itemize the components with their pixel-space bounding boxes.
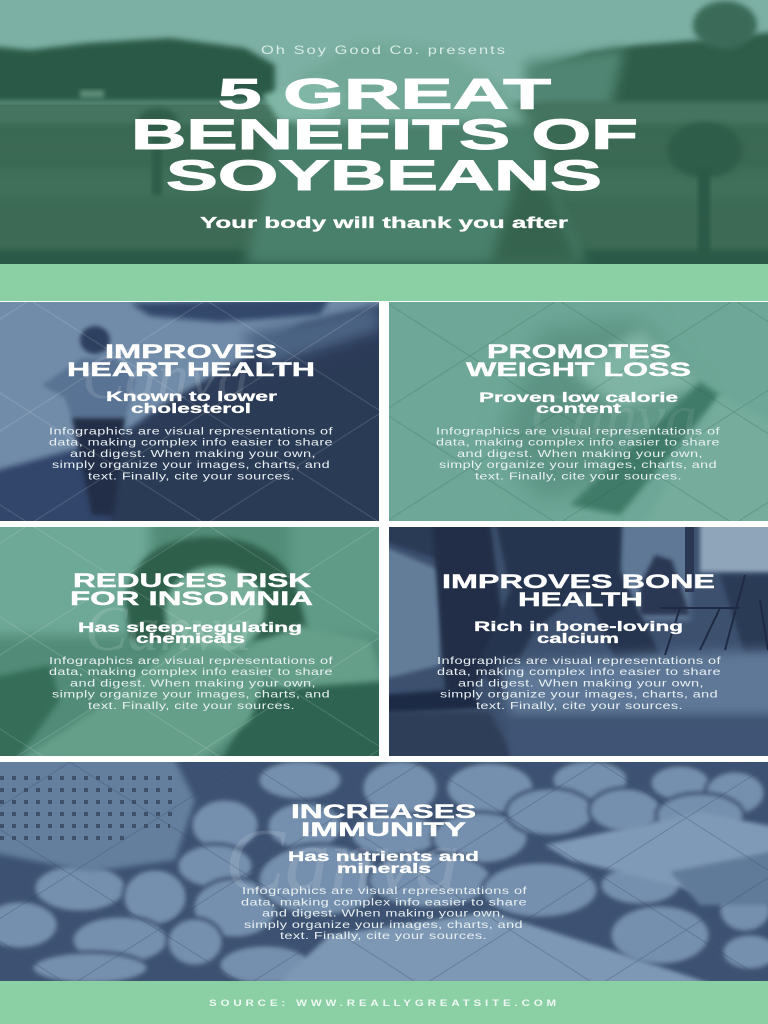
subheading: chemicals [136,631,245,646]
panel photo: people walking in a cafe [389,527,768,756]
body text [49,426,333,482]
body text: text. Finally, cite your sources. [88,700,295,712]
heading [442,571,715,611]
subheading [288,849,479,876]
body text: and digest. When making your own, [70,678,316,690]
subheading: Has nutrients and [288,849,479,864]
body text: data, making complex info easier to share [436,436,720,448]
hero intro line: Oh Soy Good Co. presents [261,43,507,57]
subtitle: Your body will thank you after [200,215,568,232]
body text: text. Finally, cite your sources. [476,700,683,712]
heading: WEIGHT LOSS [466,359,691,381]
heading: IMPROVES [105,341,277,363]
body text: Infographics are visual representations of [242,885,527,897]
heading: FOR INSOMNIA [70,588,313,610]
body text: and digest. When making your own, [262,908,505,920]
heading: PROMOTES [487,341,671,363]
panel: promotes weight loss [389,302,768,530]
panel photo: woman resting [0,527,379,756]
heading: IMMUNITY [301,819,466,841]
heading [70,570,313,610]
subheading [479,390,679,416]
subheading [78,620,302,646]
title: BENEFITS OF [131,111,638,159]
body text: Infographics are visual representations of [436,426,720,438]
body text: text. Finally, cite your sources. [280,930,487,942]
hero panel [0,0,768,280]
body text: data, making complex info easier to share [437,666,721,678]
title: 5 GREAT [218,70,551,118]
panel photo: hand on scale [389,302,768,530]
body text: Infographics are visual representations of [49,655,333,667]
panel photo: woman resting: Canva [85,593,252,664]
subheading: Proven low calorie [479,390,679,405]
body text: simply organize your images, charts, and [52,688,330,700]
subheading: cholesterol [131,401,251,416]
accent band [0,264,768,301]
body text: text. Finally, cite your sources. [475,470,682,482]
heading: HEART HEALTH [67,359,315,381]
heading [67,341,315,381]
body text: simply organize your images, charts, and [244,919,523,931]
heading: HEALTH [518,589,643,611]
footer band [0,981,768,1024]
body text: and digest. When making your own, [70,448,316,460]
heading [466,341,691,381]
subheading: calcium [537,631,619,646]
body text: and digest. When making your own, [458,678,704,690]
body text: Infographics are visual representations of [49,426,333,438]
subheading [106,389,278,416]
heading [291,801,476,841]
body text [241,885,527,942]
title [131,70,638,200]
body text: simply organize your images, charts, and [440,688,718,700]
body text: Infographics are visual representations of [437,655,721,667]
body text: data, making complex info easier to share [49,666,333,678]
panel photo: runner: Canva [82,341,249,412]
body text: data, making complex info easier to share [241,896,527,908]
body text [49,655,333,712]
heading: INCREASES [291,801,476,823]
subheading: Has sleep-regulating [78,620,302,635]
panel photo: soybeans: Canva [225,811,460,910]
body text [437,655,721,712]
panel: improves bone health [389,527,768,756]
subheading: content [536,401,622,416]
subheading: Rich in bone-loving [474,619,683,634]
panel photo: hand on scale: Canva [530,381,697,452]
title: SOYBEANS [166,152,602,200]
panel: reduces risk for insomnia [0,527,379,756]
heading: IMPROVES BONE [442,571,715,593]
subheading [474,619,683,646]
body text: data, making complex info easier to share [49,436,333,448]
body text [436,426,720,482]
panel: increases immunity [0,750,768,990]
subheading: minerals [337,861,431,876]
body text: simply organize your images, charts, and [439,459,717,471]
heading: REDUCES RISK [73,570,311,592]
body text: text. Finally, cite your sources. [88,470,295,482]
subheading: Known to lower [106,389,278,404]
source line: SOURCE: WWW.REALLYGREATSITE.COM [209,998,560,1008]
panel: improves heart health [0,302,379,521]
panel photo: soybeans [0,750,768,990]
panel photo: runner [0,302,379,521]
body text: simply organize your images, charts, and [52,459,330,471]
body text: and digest. When making your own, [457,448,703,460]
